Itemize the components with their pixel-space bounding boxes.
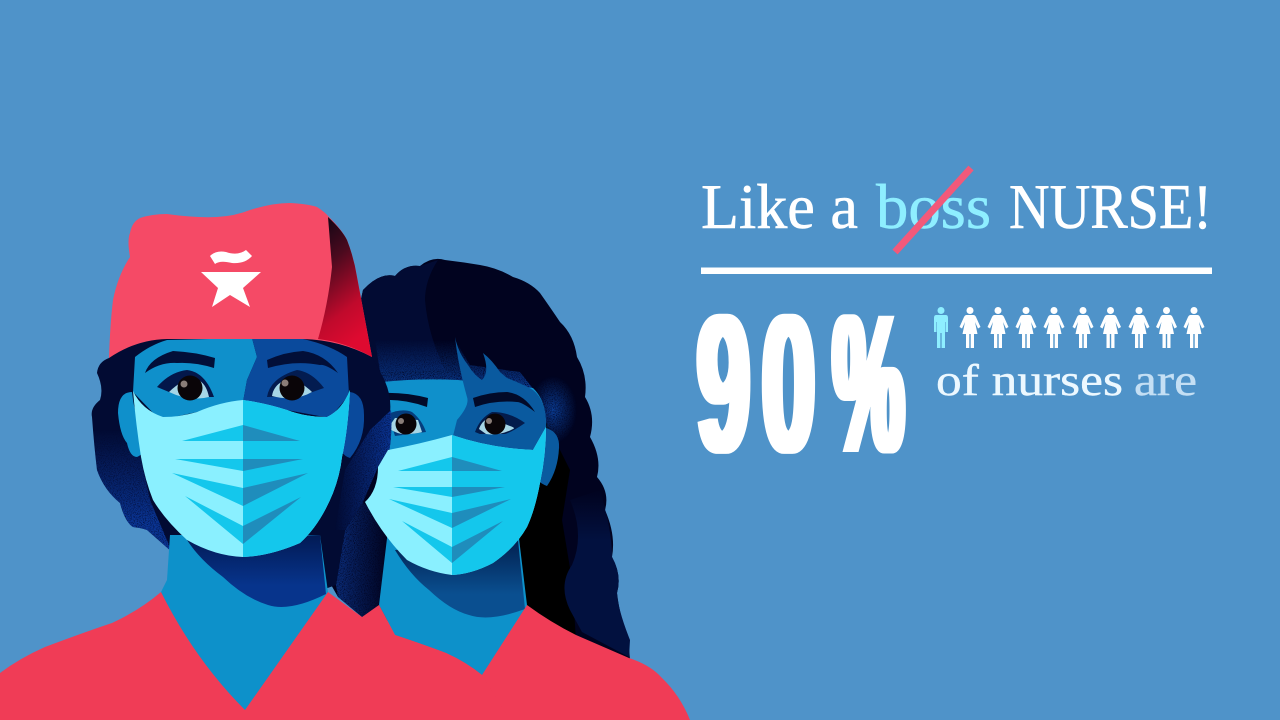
nurse 2 neck (379, 530, 540, 695)
nurse 1 mask (133, 390, 350, 557)
nurse 2 face (380, 379, 546, 470)
nurse 1 neck shadow (187, 535, 326, 607)
nurse 1 neck (161, 535, 328, 720)
nurse 2 eyebrow right (473, 392, 535, 412)
nurse 2 hair side lock (564, 490, 630, 657)
icon: man (934, 307, 948, 348)
divider rule (701, 268, 1212, 274)
icon: tilde and star emblem (201, 250, 261, 307)
heading: Like a boss NURSE! (701, 171, 1212, 242)
nurse 2 hair (317, 259, 630, 660)
nurse 1 hair grain right (335, 410, 392, 530)
heading: Like a boss NURSE!: NURSE! (1009, 171, 1212, 242)
nurse 1 eyebrow left (145, 351, 215, 373)
nurse 1 hair grain left (93, 430, 172, 552)
nurse 2 ear (535, 428, 559, 486)
nurse 1 shirt (0, 592, 510, 720)
nurse 1 cap (109, 203, 372, 358)
nurse 2 left eye (388, 410, 426, 436)
heading: Like a boss NURSE!: boss (876, 171, 991, 242)
nurse 2 mask (365, 427, 546, 575)
nurse 2 hair lighter crown (350, 260, 445, 372)
nurse 2 shirt (379, 605, 690, 720)
illustration: nurse behind (317, 259, 690, 720)
heading: Like a boss NURSE!: Like a (701, 171, 858, 242)
caption: of nurses are: are (1134, 356, 1197, 405)
big stat: 90% (697, 273, 904, 494)
nurse 1 face shadow (243, 338, 349, 418)
nurse 2 hair grain right of face (529, 376, 577, 444)
infographic canvas: % (833, 273, 904, 494)
nurse 2 hair grain lower lock (336, 502, 388, 617)
nurse 1 eyebrow right (267, 351, 338, 373)
nurse 2 right eye (475, 412, 525, 434)
nurse 1 right ear (337, 392, 364, 458)
nurse 2 eyebrow left (382, 393, 428, 407)
nurse 1 face (133, 338, 257, 420)
cap side shadow (318, 217, 372, 357)
big stat: 90%: 9 (697, 273, 750, 494)
nurse 2 hair black inner shade (510, 420, 576, 640)
caption: of nurses are (936, 356, 1197, 405)
nurse 1 left eye (157, 370, 214, 400)
strike-through line over boss (895, 168, 971, 252)
icons: women (960, 307, 1204, 348)
illustration: nurse in front (0, 203, 510, 720)
nurse 1 left ear (118, 392, 146, 457)
nurse 1 hair (92, 335, 391, 590)
big stat: 90%: 0 (762, 273, 815, 494)
nurse 2 neck shadow (395, 540, 525, 617)
nurse 1 right eye (267, 370, 324, 400)
nurse 2 hair grain above forehead (375, 340, 534, 390)
nurse 2 face shadow with hair strands (452, 337, 546, 460)
pictogram row: 1 man, 9 women (934, 307, 1204, 348)
caption: of nurses are: of nurses (936, 356, 1123, 405)
